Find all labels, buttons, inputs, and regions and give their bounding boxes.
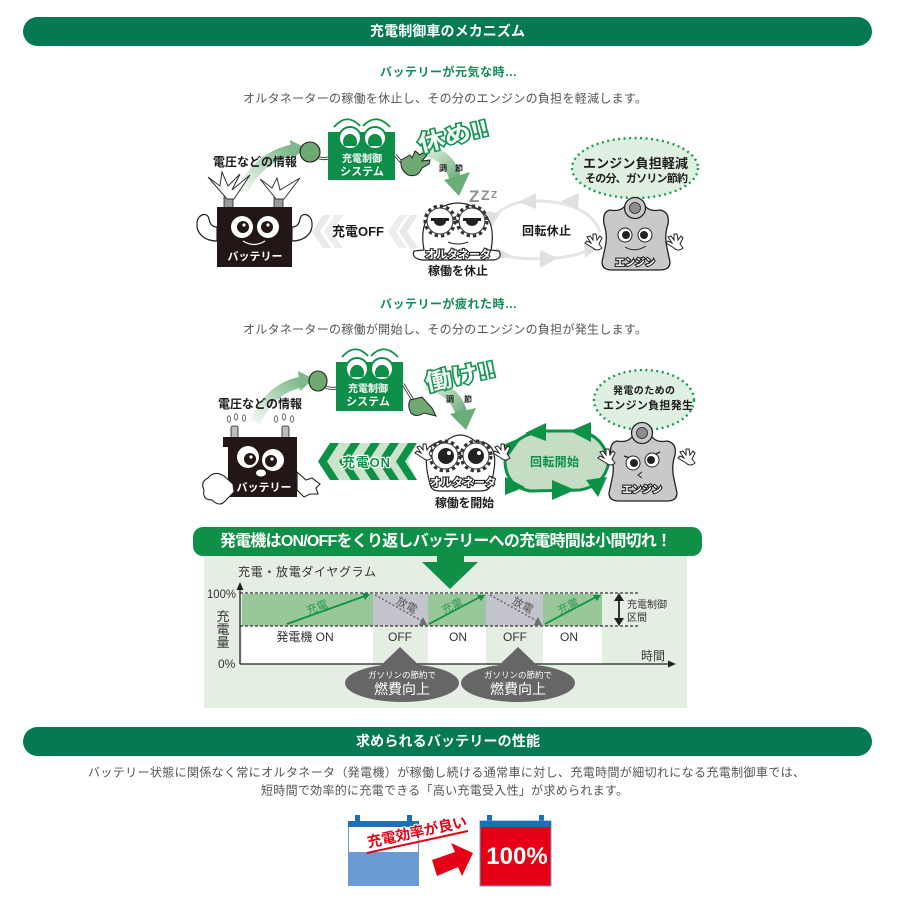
paragraph <box>88 764 805 798</box>
axis labels: 区間 <box>627 612 647 624</box>
label: adjust second glyph: 節 <box>455 163 463 173</box>
axis labels: 電 <box>216 622 230 637</box>
charge arrows <box>287 593 601 624</box>
rotation loop stopped <box>484 193 600 268</box>
axis labels: 0% <box>218 657 236 671</box>
speech bubble: engine load reduced: エンジン負担軽減 <box>583 156 688 171</box>
axis arrowheads <box>236 582 676 668</box>
label: adjust: 調 <box>439 164 447 173</box>
description: alternator started: オルタネーターの稼働が開始し、その分のエンジンの負担が発生します。 <box>243 322 647 336</box>
charge labels: 充電 <box>439 596 465 617</box>
callout: fuel saving 1: ガソリンの節約で <box>368 670 436 680</box>
subheading: battery healthy: バッテリーが元気な時… <box>380 64 517 79</box>
paragraph: バッテリー状態に関係なく常にオルタネータ（発電機）が稼働し続ける通常車に対し、充電時間が細切れになる充電制御車では、 <box>88 764 805 780</box>
axis labels: 量 <box>216 635 230 650</box>
axis labels: 100% <box>207 587 236 601</box>
axis labels: 充 <box>216 609 230 624</box>
battery character healthy: バッテリー <box>228 250 282 263</box>
control system character <box>300 119 430 180</box>
label: charge on: 充電ON <box>342 455 390 470</box>
scene: charge on <box>203 349 695 510</box>
axis labels: 充電制御 <box>627 598 667 611</box>
header: mechanism: 充電制御車のメカニズム <box>370 23 525 39</box>
charge labels <box>305 596 581 617</box>
label: operation started: 稼働を開始 <box>435 495 494 510</box>
battery character healthy <box>197 172 312 267</box>
label: adjust: 調 <box>446 395 454 404</box>
paragraph: 短時間で効率的に充電できる「高い充電受入性」が求められます。 <box>261 782 628 798</box>
arrow: info from battery to control system <box>243 140 306 190</box>
callout: fuel saving 1 <box>345 647 459 702</box>
arrow: control to alternator <box>420 150 470 196</box>
control range arrow <box>614 593 624 626</box>
alternator character working <box>415 435 510 491</box>
battery partially charged <box>348 815 419 886</box>
rotation loop running: 回転開始 <box>530 454 579 469</box>
control system character: 充電制御 <box>342 152 382 165</box>
header: required performance <box>23 727 872 756</box>
on off labels: 発電機 ON <box>276 630 334 644</box>
underline <box>367 831 468 853</box>
engine character strained <box>598 422 695 501</box>
subheading: battery tired: バッテリーが疲れた時… <box>380 296 517 311</box>
callout: rest: 休め!! <box>415 114 491 157</box>
callout: fuel saving 2: ガソリンの節約で <box>484 670 552 680</box>
chart title: 充電・放電ダイヤグラム <box>238 564 376 579</box>
engine character strained: エンジン <box>622 484 662 496</box>
zzz: Z <box>491 190 497 201</box>
charge labels: 充電 <box>305 598 330 617</box>
chart: charge diagram <box>207 582 676 671</box>
battery efficiency illustration <box>348 813 551 886</box>
speech bubble: engine load generated: エンジン負担発生 <box>603 398 693 412</box>
arrow: info from battery to control system <box>255 371 314 422</box>
callout: work: 働け!! <box>423 356 498 396</box>
speech bubble: engine load reduced: その分、ガソリン節約 <box>585 171 688 185</box>
speech bubble: engine load generated: 発電のための <box>613 384 675 397</box>
banner: on off repeat <box>193 527 702 556</box>
header: mechanism <box>23 17 872 46</box>
axis labels: 時間 <box>641 649 665 663</box>
banner: on off repeat: 発電機はON/OFFをくり返しバッテリーへの充電時間は小間切れ！ <box>220 531 672 550</box>
label: voltage info: 電圧などの情報 <box>213 154 297 169</box>
alternator character working: オルタネータ <box>430 476 496 489</box>
on off labels: ON <box>449 630 467 644</box>
discharge labels <box>394 594 536 616</box>
alternator character sleeping <box>413 203 500 261</box>
battery character tired <box>203 414 320 504</box>
header: required performance: 求められるバッテリーの性能 <box>356 733 540 749</box>
label: charge off: 充電OFF <box>332 224 384 239</box>
label: good charge efficiency: 充電効率が良い <box>365 813 469 851</box>
charge labels: 充電 <box>555 596 581 617</box>
discharge arrows <box>375 595 542 625</box>
control system character: 充電制御 <box>348 382 388 395</box>
arrow: control to alternator <box>425 384 476 430</box>
battery fully charged: 100% <box>486 843 548 870</box>
speech bubble: engine load generated <box>594 370 694 430</box>
callout: fuel saving 2: 燃費向上 <box>490 681 546 697</box>
alternator character sleeping: オルタネータ <box>425 248 491 261</box>
arrow: no charge chevrons <box>312 215 418 248</box>
zzz <box>469 187 497 206</box>
control system character <box>309 349 436 416</box>
label: operation stopped: 稼働を休止 <box>428 263 488 278</box>
zzz: Z <box>481 187 490 203</box>
on off labels: OFF <box>503 630 527 644</box>
engine character relaxed: エンジン <box>615 257 655 269</box>
battery fully charged <box>480 815 551 886</box>
scene: charge off <box>197 114 698 278</box>
label: voltage info: 電圧などの情報 <box>218 396 302 411</box>
red arrow <box>432 843 473 876</box>
control system character: システム <box>340 165 384 178</box>
callout: fuel saving 1: 燃費向上 <box>374 681 430 697</box>
on off labels: OFF <box>388 630 412 644</box>
axis labels <box>207 587 667 671</box>
speech bubble: engine load reduced <box>572 138 698 198</box>
discharge labels: 放電 <box>394 594 420 616</box>
diagram panel: charge/discharge <box>193 527 702 708</box>
zzz: Z <box>469 187 479 206</box>
battery character tired: バッテリー <box>236 481 292 494</box>
discharge labels: 放電 <box>510 594 536 616</box>
on off labels: ON <box>560 630 578 644</box>
rotation loop running <box>503 422 609 500</box>
control system character: システム <box>346 395 390 408</box>
axes <box>240 588 670 664</box>
label: rotation stopped: 回転休止 <box>522 223 571 238</box>
arrow: charging chevrons <box>318 443 417 480</box>
callout: fuel saving 2 <box>461 647 575 702</box>
engine character relaxed <box>585 198 683 270</box>
description: alternator stopped: オルタネーターの稼働を休止し、その分のエンジンの負担を軽減します。 <box>243 90 647 106</box>
on off labels <box>276 630 578 644</box>
large down arrow <box>422 556 478 589</box>
label: adjust second glyph: 節 <box>464 394 472 404</box>
